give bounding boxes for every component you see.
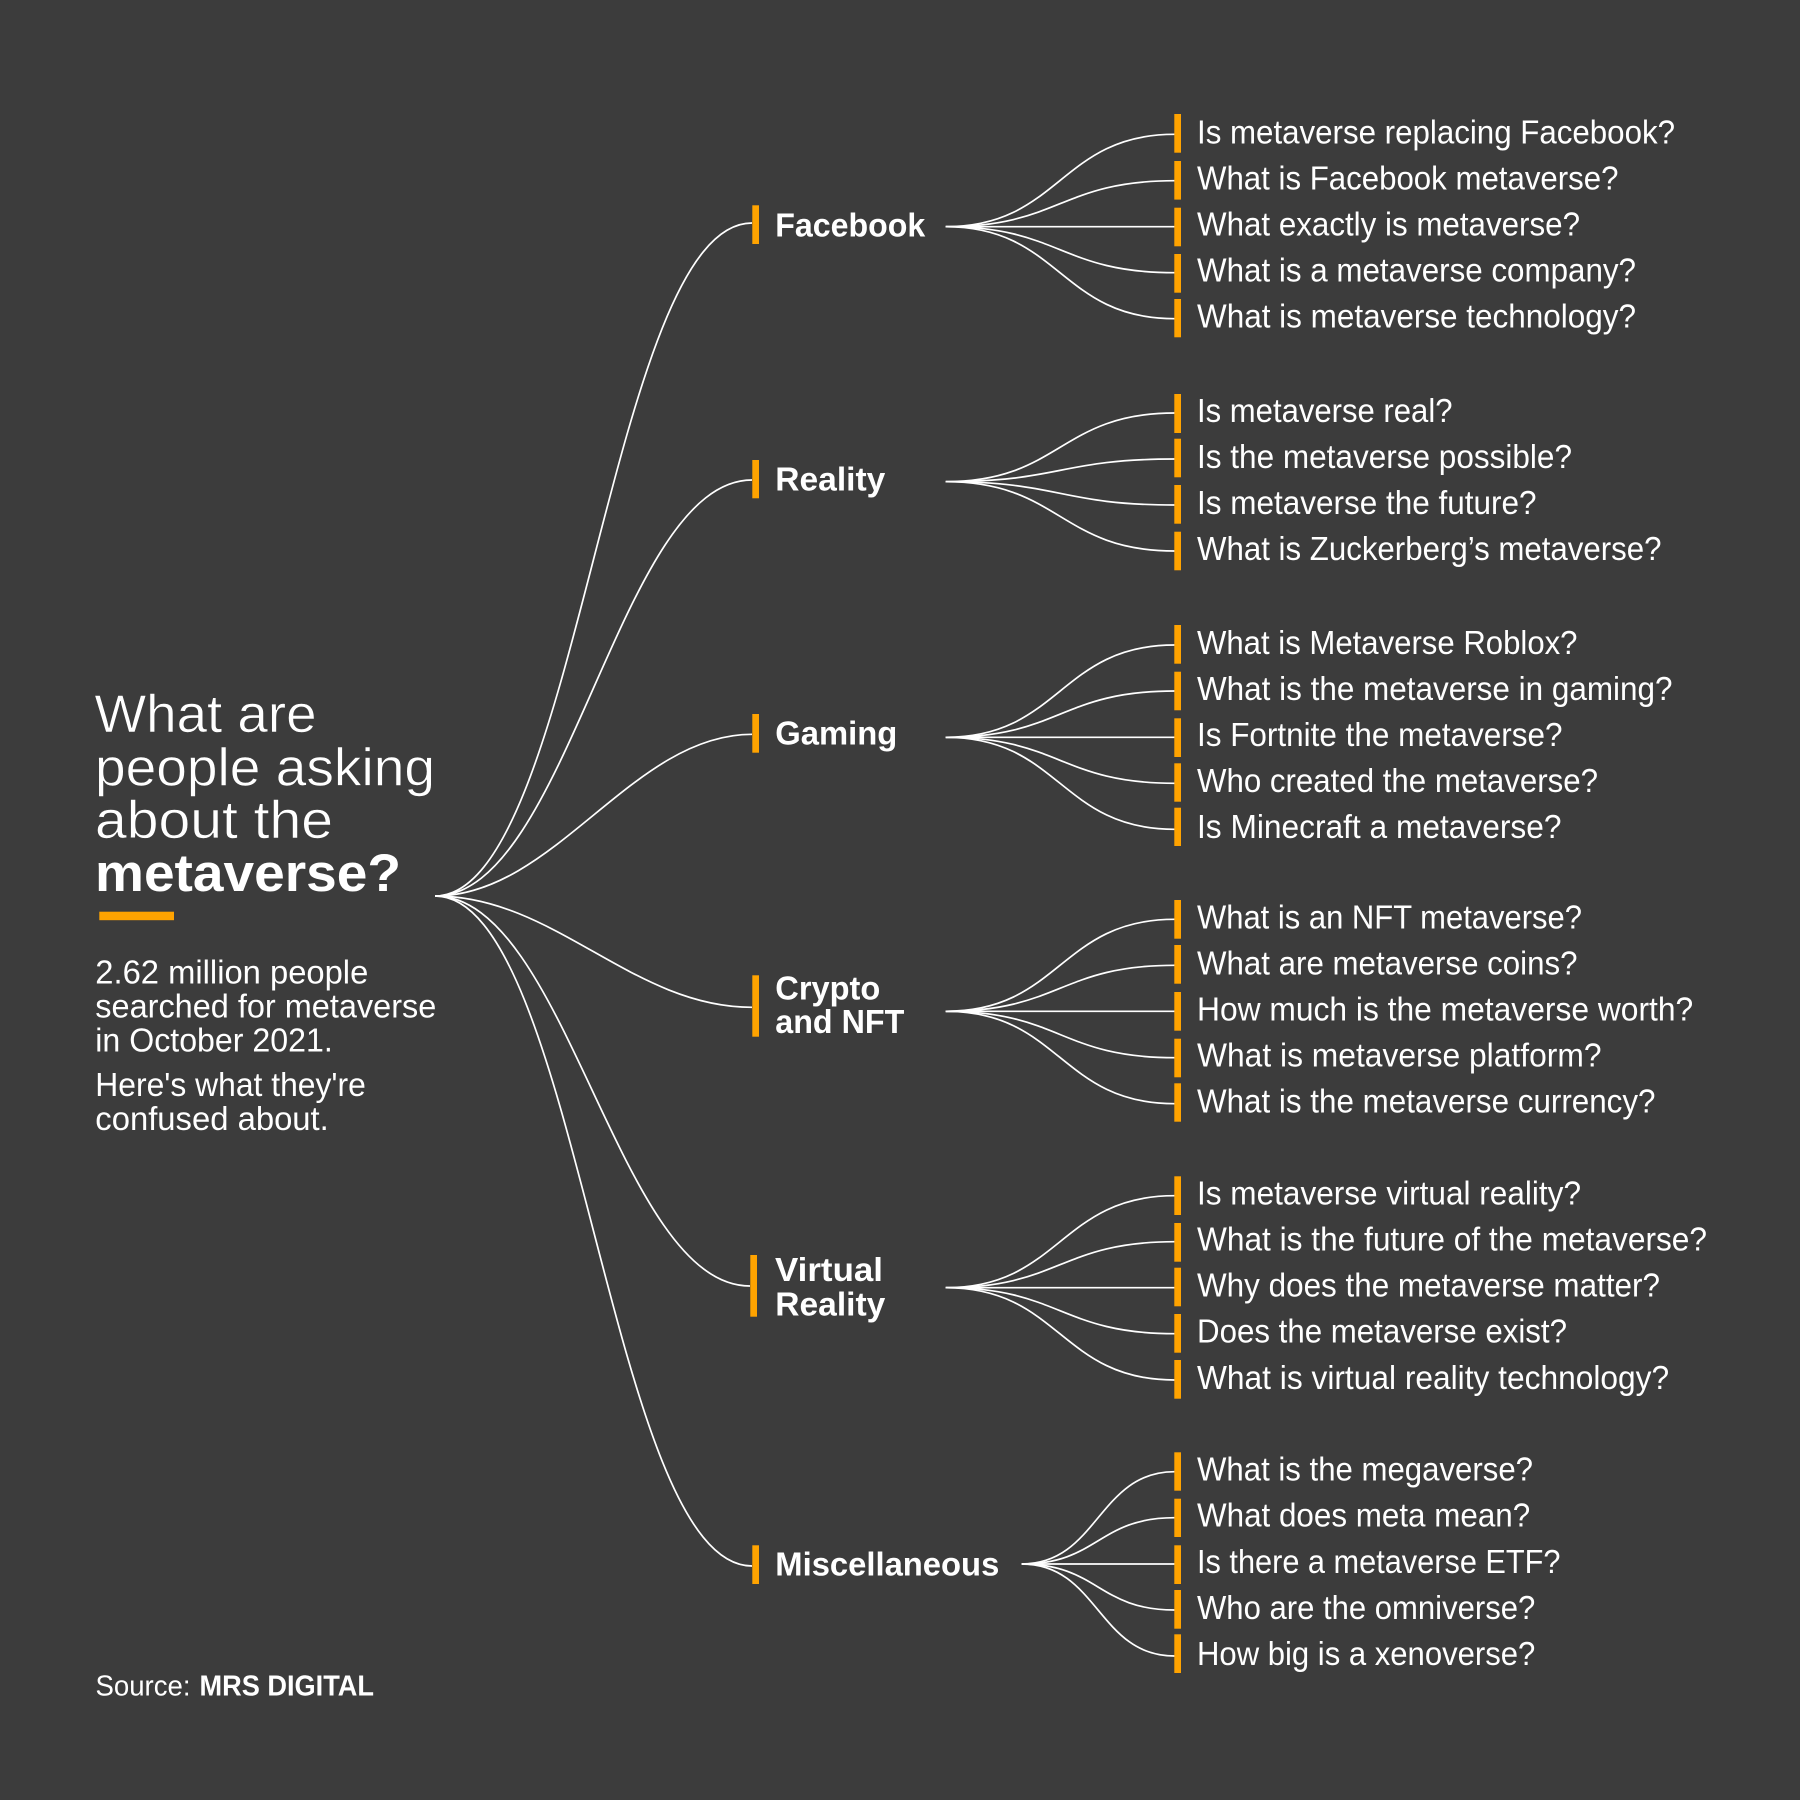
intro text: 2.62 million people <box>95 954 368 991</box>
question: Is metaverse real? <box>946 392 1452 482</box>
title accent bar <box>99 912 174 920</box>
question: What are metaverse coins? <box>946 944 1578 1011</box>
question: Is metaverse replacing Facebook? <box>946 114 1675 227</box>
title <box>94 685 435 903</box>
question: What is Metaverse Roblox?: What is Metaverse Roblox? <box>1197 624 1578 661</box>
category: Crypto and NFT: Crypto <box>775 970 880 1006</box>
question: Is metaverse replacing Facebook?: Is metaverse replacing Facebook? <box>1197 114 1675 151</box>
question: What are metaverse coins?: What are metaverse coins? <box>1197 944 1578 982</box>
panel: Facebook <box>752 114 1675 337</box>
question: How big is a xenoverse?: How big is a xenoverse? <box>1197 1635 1535 1672</box>
question: Is Fortnite the metaverse? <box>946 716 1562 757</box>
question: Is metaverse real?: Is metaverse real? <box>1197 392 1452 429</box>
question: What is Zuckerberg’s metaverse?: What is Zuckerberg’s metaverse? <box>1197 530 1662 567</box>
intro text <box>95 954 436 1137</box>
question: What is virtual reality technology? <box>946 1288 1669 1399</box>
panel: Miscellaneous <box>752 1451 1560 1673</box>
category: Crypto and NFT <box>752 970 904 1040</box>
intro text: confused about. <box>95 1100 329 1137</box>
connectors: root to categories <box>435 223 752 1566</box>
category: Crypto and NFT: and NFT <box>775 1003 904 1040</box>
question: Why does the metaverse matter? <box>946 1267 1660 1306</box>
question: Is Fortnite the metaverse?: Is Fortnite the metaverse? <box>1197 716 1562 753</box>
category: Reality: Reality <box>775 460 886 497</box>
intro text: searched for metaverse <box>95 988 436 1025</box>
question: Who created the metaverse? <box>946 737 1598 802</box>
question: Is there a metaverse ETF?: Is there a metaverse ETF? <box>1197 1543 1560 1580</box>
panel: Virtual Reality <box>750 1175 1707 1399</box>
question: How much is the metaverse worth?: How much is the metaverse worth? <box>1197 990 1693 1028</box>
question: Is Minecraft a metaverse? <box>946 737 1562 846</box>
question: What is the megaverse? <box>1022 1451 1533 1564</box>
question: Who are the omniverse?: Who are the omniverse? <box>1197 1589 1535 1626</box>
question: Who created the metaverse?: Who created the metaverse? <box>1197 762 1598 799</box>
category: Facebook: Facebook <box>775 206 926 243</box>
question: What does meta mean? <box>1022 1497 1530 1564</box>
question: Is the metaverse possible?: Is the metaverse possible? <box>1197 438 1572 475</box>
question: What is the megaverse?: What is the megaverse? <box>1197 1451 1533 1488</box>
question: What is an NFT metaverse? <box>946 898 1582 1011</box>
panel: Crypto and NFT <box>752 898 1693 1122</box>
question: What is metaverse technology? <box>946 227 1636 337</box>
question: Why does the metaverse matter?: Why does the metaverse matter? <box>1197 1267 1660 1304</box>
source: Source: <box>96 1671 190 1703</box>
question: Does the metaverse exist? <box>946 1288 1567 1353</box>
question: What is a metaverse company?: What is a metaverse company? <box>1197 252 1636 289</box>
question: What is Facebook metaverse?: What is Facebook metaverse? <box>1197 160 1618 197</box>
intro text: in October 2021. <box>95 1022 333 1059</box>
question: Is the metaverse possible? <box>946 438 1572 482</box>
source <box>96 1671 374 1703</box>
question: What exactly is metaverse? <box>946 206 1580 246</box>
question: What is Facebook metaverse? <box>946 160 1618 227</box>
panel: Reality <box>752 392 1662 570</box>
question: What is metaverse technology?: What is metaverse technology? <box>1197 298 1636 335</box>
title: about the <box>95 791 333 850</box>
question: How big is a xenoverse? <box>1022 1564 1535 1673</box>
question: Is there a metaverse ETF? <box>1022 1543 1560 1584</box>
category: Virtual Reality <box>750 1251 886 1322</box>
question: What is Zuckerberg’s metaverse? <box>946 482 1662 570</box>
question: Who are the omniverse? <box>1022 1564 1535 1629</box>
title: people asking <box>95 738 435 797</box>
category: Virtual Reality: Virtual <box>775 1251 883 1288</box>
question: What is the metaverse in gaming? <box>946 670 1672 737</box>
question: What is Metaverse Roblox? <box>946 624 1578 737</box>
question: What is the metaverse currency?: What is the metaverse currency? <box>1197 1082 1656 1119</box>
category: Miscellaneous: Miscellaneous <box>775 1546 999 1583</box>
panel: Gaming <box>752 624 1672 846</box>
source: MRS DIGITAL <box>200 1671 374 1703</box>
question: What is the future of the metaverse? <box>946 1221 1707 1288</box>
question: What is an NFT metaverse?: What is an NFT metaverse? <box>1197 898 1582 936</box>
question: What is metaverse platform?: What is metaverse platform? <box>1197 1036 1602 1073</box>
question: What does meta mean?: What does meta mean? <box>1197 1497 1530 1534</box>
question: What is virtual reality technology?: What is virtual reality technology? <box>1197 1359 1669 1396</box>
question: How much is the metaverse worth? <box>946 990 1693 1031</box>
question: Does the metaverse exist?: Does the metaverse exist? <box>1197 1313 1567 1350</box>
intro text: Here's what they're <box>95 1066 366 1103</box>
question: What is a metaverse company? <box>946 227 1636 293</box>
question: What is the metaverse in gaming?: What is the metaverse in gaming? <box>1197 670 1672 707</box>
question: Is metaverse the future?: Is metaverse the future? <box>1197 484 1536 521</box>
question: What is the future of the metaverse?: What is the future of the metaverse? <box>1197 1221 1707 1258</box>
question: What exactly is metaverse?: What exactly is metaverse? <box>1197 206 1580 243</box>
question: What is metaverse platform? <box>946 1011 1602 1077</box>
question: Is metaverse the future? <box>946 482 1536 524</box>
title: metaverse? <box>95 844 401 903</box>
category: Gaming: Gaming <box>775 714 897 752</box>
question: Is metaverse virtual reality? <box>946 1175 1581 1288</box>
question: Is Minecraft a metaverse?: Is Minecraft a metaverse? <box>1197 808 1562 845</box>
question: What is the metaverse currency? <box>946 1011 1656 1122</box>
title: What are <box>94 685 316 744</box>
category: Virtual Reality: Reality <box>775 1285 886 1322</box>
question: Is metaverse virtual reality?: Is metaverse virtual reality? <box>1197 1175 1581 1212</box>
